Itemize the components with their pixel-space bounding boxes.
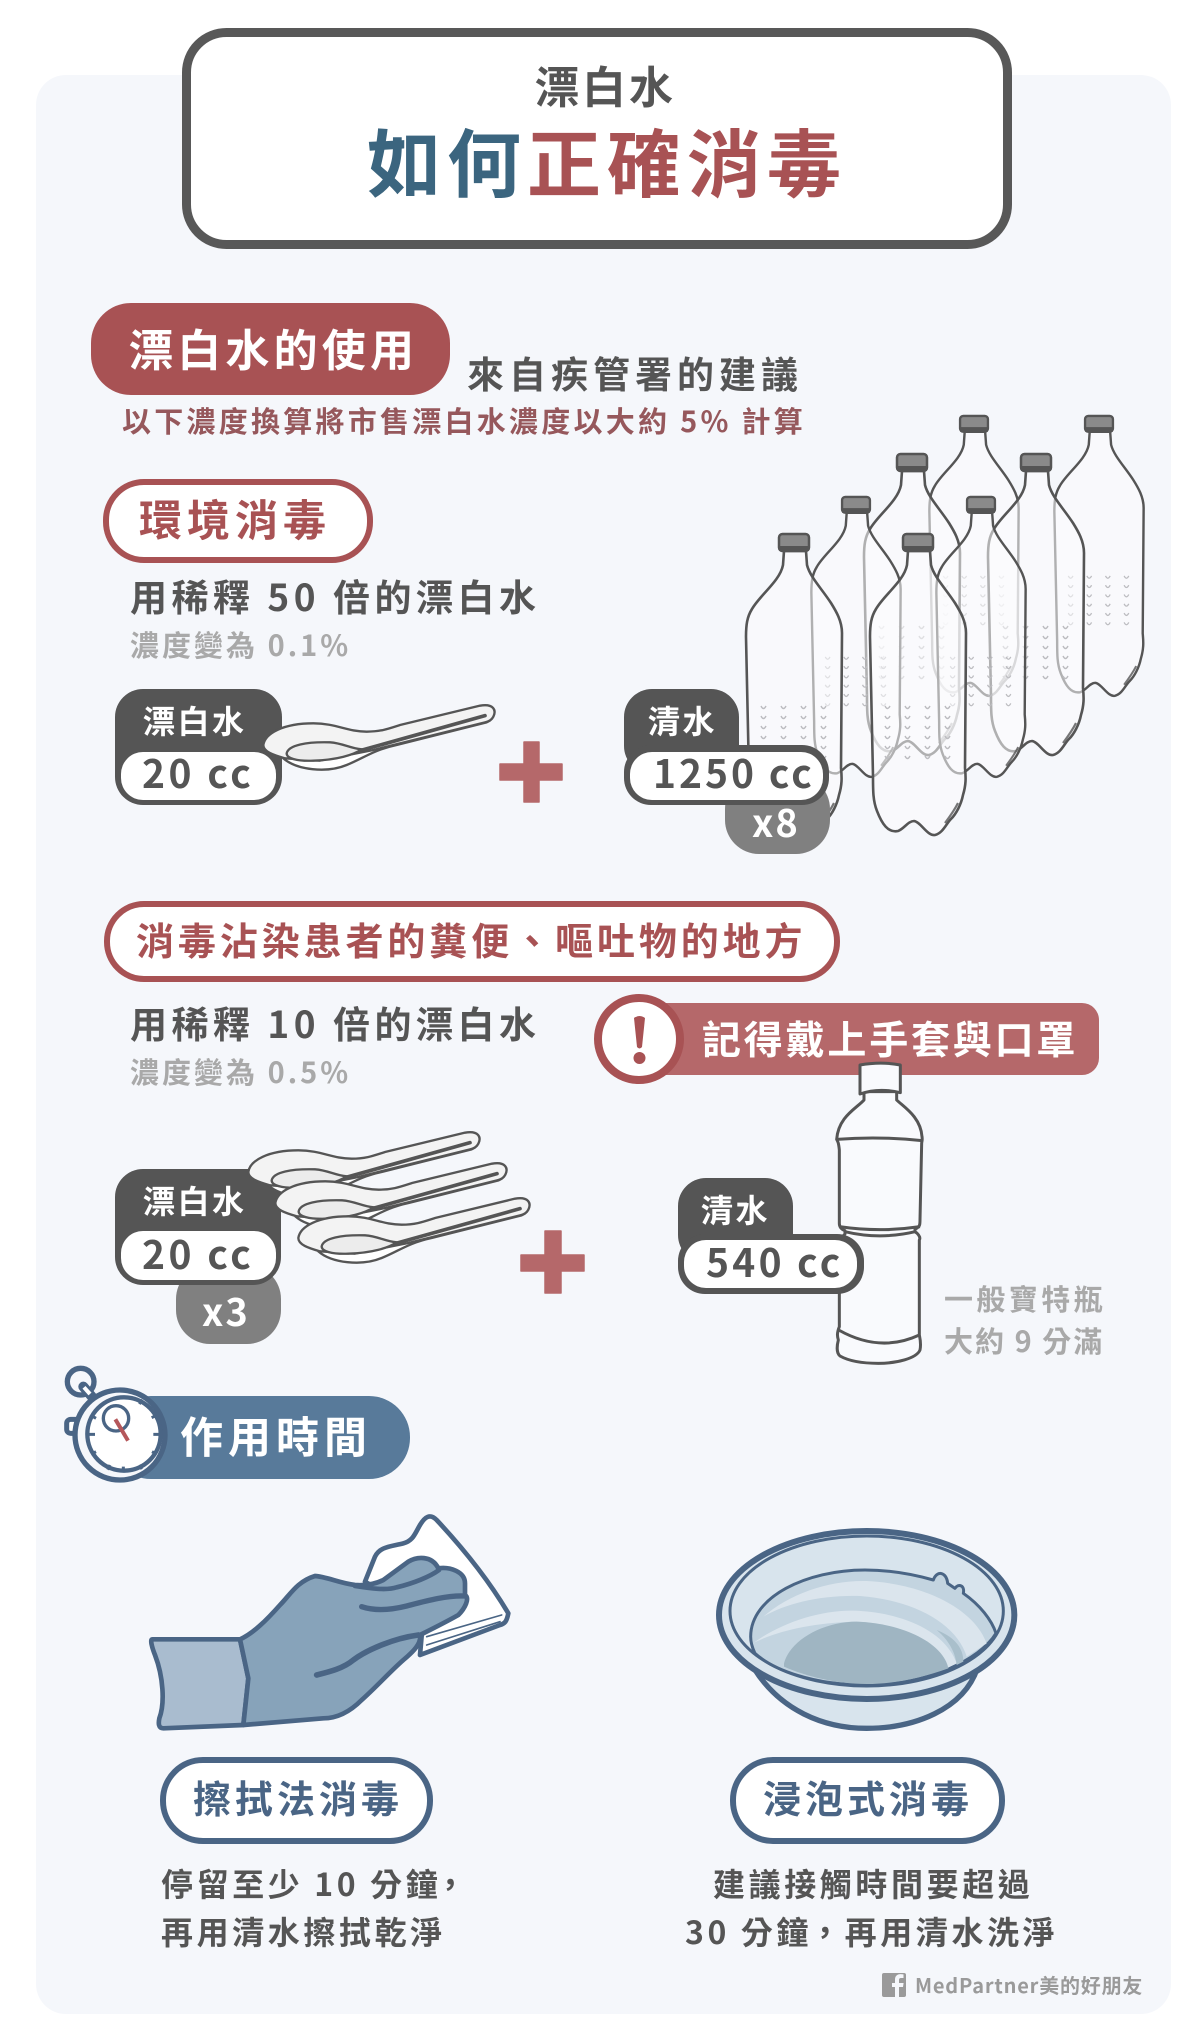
illustration: three spoons — [248, 1132, 530, 1263]
text: soak instructions: 建議接觸時間要超過 — [713, 1860, 1033, 1906]
illustration: gloved hand wiping with cloth — [151, 1516, 508, 1728]
title box — [186, 32, 1008, 244]
pill: soak method: 浸泡式消毒 — [763, 1769, 973, 1824]
text: about nine tenths full: 大約 9 分滿 — [944, 1319, 1104, 1361]
icon: plus — [500, 742, 562, 802]
text: wipe instructions: 再用清水擦拭乾淨 — [161, 1908, 446, 1954]
section heading: bleach use — [91, 303, 450, 395]
pill: environment disinfection: 環境消毒 — [139, 487, 331, 549]
label: bleach 20 cc x3 — [115, 1169, 281, 1344]
illustration: plastic bottle — [837, 1063, 922, 1363]
icon: stopwatch — [67, 1368, 165, 1480]
icon: plus — [521, 1231, 584, 1293]
text: wipe instructions: 停留至少 10 分鐘， — [161, 1860, 470, 1906]
label: water 540 cc — [678, 1178, 864, 1294]
label: bleach 20 cc: 20 cc — [142, 744, 254, 800]
text: source of recommendation: 來自疾管署的建議 — [467, 345, 803, 399]
illustration: eight large bottles — [746, 416, 1144, 835]
credit: facebook icon and name: MedPartner美的好朋友 — [915, 1970, 1143, 1999]
text: soak instructions — [685, 1860, 1058, 1954]
label: bleach 20 cc: 漂白水 — [143, 697, 247, 743]
text: dilute 50x: 用稀釋 50 倍的漂白水 — [130, 568, 540, 622]
section heading: contact time — [110, 1396, 410, 1479]
text: concentration 0.5%: 濃度變為 0.5% — [130, 1050, 351, 1092]
label: water 540 cc: 清水 — [701, 1186, 770, 1232]
illustration: spoon — [263, 705, 495, 770]
title: subject: 漂白水 — [535, 52, 676, 116]
pill: soak method — [733, 1760, 1002, 1841]
title: main heading: 如何正確消毒 — [367, 106, 847, 213]
text: soak instructions: 30 分鐘，再用清水洗淨 — [685, 1908, 1058, 1954]
label: bleach 20 cc x3: 20 cc — [142, 1225, 254, 1281]
label: bleach 20 cc — [115, 689, 282, 805]
label: bleach 20 cc x3: x3 — [202, 1282, 250, 1337]
label: water 1250 cc x8: 1250 cc — [653, 744, 815, 800]
text: concentration note: 以下濃度換算將市售漂白水濃度以大約 5% 計算 — [122, 399, 806, 441]
callout: wear gloves and mask — [598, 998, 1099, 1080]
section heading: bleach use: 漂白水的使用 — [129, 315, 418, 379]
text: wipe instructions — [161, 1860, 470, 1954]
label: water 1250 cc x8 — [624, 689, 830, 854]
pill: wipe method: 擦拭法消毒 — [193, 1769, 403, 1824]
callout: wear gloves and mask: 記得戴上手套與口罩 — [702, 1010, 1078, 1066]
pill: faeces and vomit disinfection — [107, 904, 837, 979]
label: water 540 cc: 540 cc — [706, 1233, 844, 1289]
section heading: contact time: 作用時間 — [180, 1404, 372, 1466]
text: concentration 0.1%: 濃度變為 0.1% — [130, 623, 351, 665]
text: dilute 10x: 用稀釋 10 倍的漂白水 — [130, 995, 540, 1049]
illustration: basin of water — [719, 1531, 1014, 1728]
text: about nine tenths full: 一般寶特瓶 — [944, 1277, 1106, 1319]
label: water 1250 cc x8: x8 — [752, 793, 800, 848]
text: about nine tenths full — [944, 1277, 1106, 1361]
pill: environment disinfection — [106, 482, 370, 560]
pill: faeces and vomit disinfection: 消毒沾染患者的糞便、嘔吐物的地方 — [136, 911, 806, 966]
label: water 1250 cc x8: 清水 — [648, 697, 717, 743]
label: bleach 20 cc x3: 漂白水 — [143, 1177, 247, 1223]
pill: wipe method — [163, 1760, 430, 1841]
